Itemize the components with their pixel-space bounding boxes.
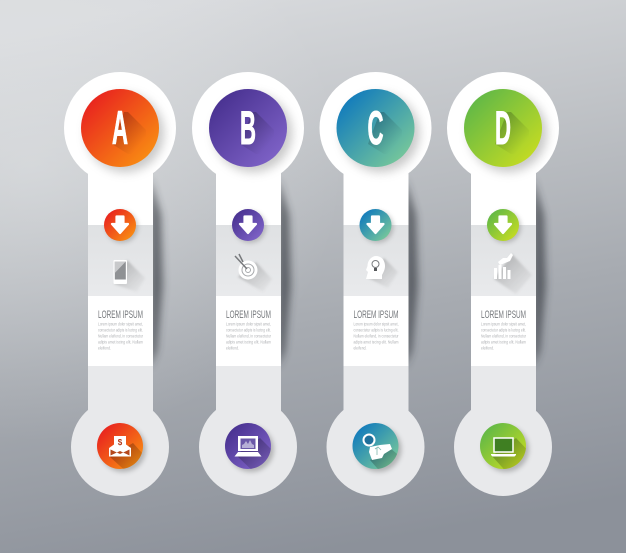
letter circle B (209, 89, 292, 172)
letter circle C: C (368, 101, 384, 154)
strip shadow C (405, 178, 418, 368)
letter circle A: A (112, 101, 128, 154)
text block A: adipis amet iscing elit. Nullam (98, 340, 143, 344)
arrow badge D (487, 209, 521, 243)
text block C (354, 309, 399, 350)
letter circle D (464, 89, 547, 172)
text block A: eleifend. (98, 346, 111, 350)
panel: column D (447, 72, 559, 496)
text block D (481, 309, 526, 350)
text block B: LOREM IPSUM (226, 309, 271, 321)
text block D: Lorem ipsum dolor sipsit amet, (481, 322, 526, 326)
text block A: Nullam eleifend, in consectetur (98, 334, 143, 338)
text block C: LOREM IPSUM (354, 309, 398, 321)
letter circle C (336, 89, 420, 172)
text block A: LOREM IPSUM (98, 309, 143, 321)
arrow badge C (360, 209, 394, 243)
letter circle D: D (495, 101, 511, 154)
text block D: Nullam eleifend, in consectetur (481, 334, 526, 338)
letter circle A (81, 89, 164, 172)
panel: column B (192, 72, 304, 496)
strip C (344, 160, 408, 416)
top disc B (192, 72, 304, 184)
text block B: consectetur adipis is luctng elit. (226, 328, 271, 332)
text block A: Lorem ipsum dolor sipsit amet, (98, 322, 143, 326)
text block D: LOREM IPSUM (481, 309, 526, 321)
text block B: adipis amet iscing elit. Nullam (226, 340, 271, 344)
text block C: adipis amet iscing elit. Nullam (354, 340, 399, 344)
strip B (216, 160, 281, 416)
text block A: consectetur adipis is luctng elit. (98, 328, 143, 332)
text block D: adipis amet iscing elit. Nullam (481, 340, 526, 344)
panel: column C (320, 72, 432, 496)
text block B (226, 309, 271, 350)
text block C: eleifend. (354, 346, 366, 350)
icon: smartphone (114, 260, 145, 292)
text block C: Nullam eleifend, in consectetur (354, 334, 399, 338)
text block D: consectetur adipis is luctng elit. (481, 328, 526, 332)
text block B: eleifend. (226, 346, 239, 350)
icon: chart with hand (494, 253, 532, 294)
text block D: eleifend. (481, 346, 494, 350)
bottom disc B (199, 398, 297, 496)
strip shadow B (278, 178, 291, 368)
text block B: Lorem ipsum dolor sipsit amet, (226, 322, 271, 326)
strip shadow D (533, 178, 546, 368)
panel: column A (64, 72, 176, 496)
bottom disc C (326, 398, 424, 496)
strip A (88, 160, 153, 416)
icon badge A: envelope: $ (118, 438, 123, 447)
top disc D (447, 72, 559, 184)
icon: target (235, 254, 272, 292)
icon: idea head (366, 256, 398, 288)
text block C: consectetur adipis is luctng elit. (354, 328, 398, 332)
text block C: Lorem ipsum dolor sipsit amet, (354, 322, 398, 326)
top disc C (320, 72, 432, 184)
arrow badge B (232, 209, 266, 243)
strip shadow A (150, 178, 163, 368)
letter circle B: B (240, 101, 256, 154)
icon badge B: monitor (225, 423, 276, 474)
text block A (98, 309, 143, 350)
strip D (471, 160, 536, 416)
icon badge D: laptop (480, 423, 531, 474)
icon badge A: envelope (97, 423, 150, 475)
arrow badge A (104, 209, 138, 243)
bottom disc D (454, 398, 552, 496)
top disc A (64, 72, 176, 184)
icon badge C: hand with magnifier (352, 423, 402, 476)
bottom disc A (71, 398, 169, 496)
text block B: Nullam eleifend, in consectetur (226, 334, 271, 338)
